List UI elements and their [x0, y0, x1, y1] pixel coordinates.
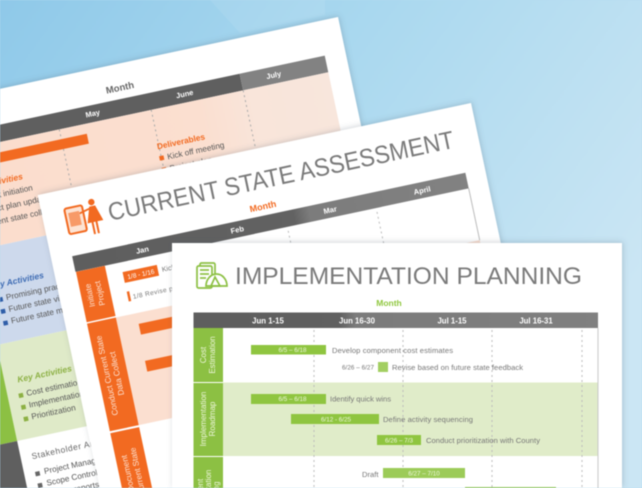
title: CURRENT STATE ASSESSMENT: [105, 126, 457, 227]
icon: presenter with tablet: [63, 197, 106, 239]
gantt row: activity sequencing: 6/12 - 6/25: [321, 416, 352, 424]
month header bar: May: [85, 108, 102, 120]
sidebar: conduct current state: Data Collect: [108, 350, 126, 396]
deliverables list: [156, 128, 228, 175]
month header bar: Feb: [230, 224, 245, 236]
icon: document with protractor: [197, 263, 227, 288]
stakeholder list: Stakeholder Analysis: [31, 433, 120, 461]
blue key activities: Future state vision: [8, 291, 75, 314]
orange gantt bar: [0, 134, 89, 204]
gantt bar: final: [465, 487, 556, 488]
month header bar: [0, 56, 328, 184]
gantt row: draft: [362, 468, 465, 479]
gantt row: prioritization: Conduct prioritization with County: [426, 436, 540, 445]
month header bar: June: [175, 88, 194, 100]
sidebar: cost estimation: [194, 328, 223, 382]
month header bar: July: [265, 69, 283, 81]
gantt row: develop cost estimates: Develop component cost estimates: [332, 346, 453, 355]
header bar: Jul 16-31: [519, 316, 553, 326]
dark sidebar: [0, 441, 71, 488]
deliverables list: Kick off meeting: [166, 140, 226, 161]
sidebar: cost estimation: Estimation: [208, 336, 217, 374]
stakeholder list: Project Management: [43, 451, 120, 476]
blue key activities: Promising practices: [5, 278, 77, 302]
blue key activities: [0, 264, 82, 328]
gantt bar: [145, 336, 265, 372]
month label: Month: [249, 199, 277, 214]
green key activities: Implementation: [28, 389, 85, 410]
sidebar: initiate project: Initiate: [83, 282, 97, 308]
sheet paper: [0, 17, 467, 488]
sheet paper: [172, 243, 622, 488]
gantt row: activity sequencing: [291, 414, 473, 424]
background glare: [210, 0, 325, 33]
deliverables list: Deliverables: [156, 131, 206, 151]
gantt row: develop cost estimates: [251, 345, 453, 355]
title: IMPLEMENTATION PLANNING: [235, 263, 582, 290]
panel: middle sheet, Current State Assessment: [38, 103, 575, 488]
green key activities: Key Activities: [16, 363, 73, 384]
sidebar: conduct current state: [87, 318, 139, 431]
gantt bar 1/8 - 1/16: [123, 265, 159, 283]
header bar: [194, 312, 598, 328]
sidebar: initiate project: Project: [93, 279, 107, 306]
gantt bar: [139, 299, 258, 335]
sidebar: implementation roadmap: Implementation: [199, 392, 208, 446]
month label: Month: [105, 80, 135, 97]
sidebar: implementation roadmap: [194, 383, 223, 456]
sidebar: conduct current state: Conduct Current State: [94, 334, 120, 416]
gantt bar 1/8 - 1/16: 1/8 - 1/16: [127, 269, 156, 281]
gantt row: quick wins: [251, 394, 391, 404]
gantt row: develop cost estimates: 6/5 – 6/18: [278, 347, 307, 354]
gantt row: draft: Draft: [362, 470, 379, 479]
peach key activities: [0, 164, 65, 231]
green key activities: Cost estimation: [26, 377, 83, 398]
stakeholder list: [31, 433, 128, 488]
sidebar: document current state: [110, 427, 162, 488]
green key activities: [14, 362, 88, 423]
month header bar: April: [413, 184, 431, 197]
month label: Month: [376, 298, 402, 308]
sidebar: initiate project: [76, 266, 116, 322]
panel: back sheet: [0, 17, 467, 488]
month header bar: Jan: [135, 244, 150, 256]
gantt row: activity sequencing: Define activity sequencing: [383, 415, 473, 424]
sidebar: cost estimation: Cost: [199, 346, 208, 363]
gantt row: revise estimates: Revise based on future state feedback: [392, 363, 523, 372]
peach band: [0, 72, 349, 283]
gantt row: prioritization: 6/26 – 7/3: [385, 438, 414, 444]
blue key activities: Future state model: [10, 302, 79, 326]
stakeholder list: Scope Control: [46, 468, 98, 488]
gantt row: quick wins: Identify quick wins: [330, 394, 391, 404]
peach row: [116, 240, 503, 425]
sidebar: document implementation planning: [194, 457, 223, 488]
milestone 1/8: 1/8 Revise plan: [132, 283, 183, 301]
panel: front sheet, Implementation Planning: [172, 243, 622, 488]
header bar: Jun 16-30: [339, 316, 376, 326]
green band: [0, 266, 390, 441]
gantt row: revise estimates: 6/26 – 6/27: [342, 364, 374, 372]
sidebar: implementation roadmap: Roadmap: [208, 401, 217, 436]
gantt row: prioritization: [377, 435, 540, 445]
task label: Kick off: [161, 262, 185, 274]
sheet paper: [38, 103, 575, 488]
blue band: [0, 171, 369, 345]
gantt row: draft: 6/27 – 7/10: [408, 470, 440, 478]
green sidebar: [0, 345, 17, 474]
gantt row: quick wins: 6/5 – 6/18: [278, 396, 307, 403]
gantt row: revise estimates: [342, 362, 523, 372]
month header bar: Mar: [323, 204, 338, 216]
header bar: Jun 1-15: [252, 316, 284, 326]
green key activities: Prioritization: [31, 403, 77, 421]
month header bar: [72, 173, 469, 272]
header bar: Jul 1-15: [437, 316, 467, 326]
table right border: [597, 328, 599, 488]
deliverables list: Project plan: [169, 155, 214, 173]
light green band: [223, 382, 598, 456]
